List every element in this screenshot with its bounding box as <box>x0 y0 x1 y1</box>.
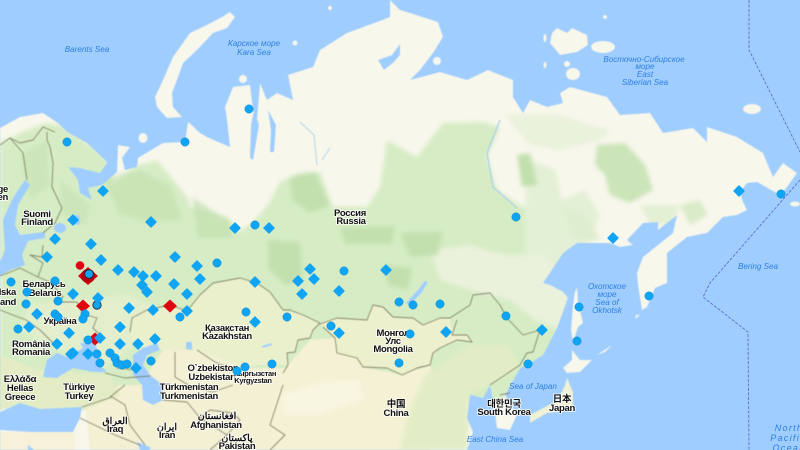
Baltic Sea <box>0 180 45 276</box>
country labels: Greece <box>5 392 35 403</box>
country labels: 대한민국 <box>487 398 521 410</box>
sea labels: Охотское <box>588 282 627 291</box>
country labels: Finland <box>21 217 53 228</box>
country labels: Улс <box>385 336 401 347</box>
sea labels: Восточно-Сибирское <box>603 55 685 64</box>
country labels: Iran <box>159 430 176 441</box>
country labels: پاکستان <box>221 433 253 444</box>
country labels: Türkmenistan <box>160 382 219 393</box>
darker forest patches <box>20 140 538 290</box>
New Siberian Islands <box>550 28 588 55</box>
country labels: South Korea <box>477 407 532 418</box>
country labels: العراق <box>102 416 128 427</box>
country labels: Kyrgyzstan <box>234 376 272 385</box>
sea labels: East <box>637 70 654 79</box>
country labels: Россия <box>334 208 366 219</box>
Lake Baikal <box>406 281 428 305</box>
sea labels: Sea of <box>595 298 619 307</box>
country labels: Turkmenistan <box>160 391 218 402</box>
country labels: Romania <box>12 347 51 358</box>
country labels: Кыргызстан <box>234 369 276 378</box>
Turkey and Balkans <box>0 355 120 410</box>
Seas and lakes <box>0 44 428 450</box>
maritime boundary: international date line <box>703 0 800 450</box>
red markers <box>76 261 177 346</box>
Taklamakan pale band <box>282 382 363 414</box>
country labels: Kazakhstan <box>202 331 252 342</box>
sea labels: Sea of Japan <box>509 382 557 391</box>
country labels: Iraq <box>107 424 124 435</box>
Novaya Zemlya <box>155 12 235 118</box>
Kazakhstan fill <box>130 278 320 368</box>
sea labels: Kara Sea <box>237 48 271 57</box>
Mediterranean Sea <box>0 403 82 432</box>
sea labels: Siberian Sea <box>622 78 669 87</box>
Ob and Yenisei gulfs <box>250 110 259 160</box>
country labels: Russia <box>336 216 367 227</box>
country labels: România <box>12 339 51 350</box>
country labels: Беларусь <box>23 279 66 290</box>
country labels: Turkey <box>65 391 94 402</box>
North Africa <box>0 432 75 450</box>
country labels: O`zbekiston <box>187 363 239 374</box>
China east green <box>400 345 520 450</box>
Black Sea <box>43 343 107 378</box>
Honshu <box>530 378 573 423</box>
Kuril Islands <box>597 315 640 355</box>
Sakhalin <box>571 287 583 342</box>
Volga and Ukraine steppe <box>22 296 150 366</box>
country labels: Afghanistan <box>190 420 242 431</box>
country labels: 中国 <box>387 398 405 410</box>
Mongolia fill <box>320 305 472 375</box>
country labels: Belarus <box>29 288 61 299</box>
country labels: Hellas <box>7 383 33 394</box>
north-east forest <box>595 143 653 203</box>
Aral Sea and Balkhash <box>186 342 272 350</box>
country labels <box>0 184 575 450</box>
country labels: Ελλάδα <box>4 374 37 385</box>
country labels: Türkiye <box>63 382 95 393</box>
sea labels: Barents Sea <box>65 45 110 54</box>
country labels: افغانستان <box>198 411 237 422</box>
Wrangel Island <box>743 104 761 114</box>
country labels: Uzbekistan <box>188 372 236 383</box>
China west desert <box>270 338 440 450</box>
country labels: China <box>384 408 409 419</box>
speckled north-east patches <box>524 162 600 266</box>
Red Sea and Persian Gulf <box>28 442 150 450</box>
sea labels: море <box>597 290 617 299</box>
country borders <box>0 127 540 450</box>
sea labels: Okhotsk <box>592 306 623 315</box>
country labels: Mongolia <box>373 344 414 355</box>
country labels: Україна <box>44 316 78 327</box>
rivers <box>487 120 517 208</box>
Caspian Sea <box>133 343 163 405</box>
sea labels: East China Sea <box>467 435 524 444</box>
lakes <box>54 223 66 233</box>
country labels: ایران <box>157 422 177 433</box>
blue circle markers <box>7 105 785 375</box>
terrain zones <box>0 115 708 450</box>
country labels: Монгол <box>376 328 410 339</box>
Central Asia and Middle East desert <box>85 350 290 450</box>
country labels: Suomi <box>23 209 51 220</box>
sea labels: Bering Sea <box>738 262 779 271</box>
light green forest zone <box>0 122 570 400</box>
sea labels: море <box>635 62 655 71</box>
Hokkaido <box>563 350 592 373</box>
sea labels: Карское море <box>228 39 280 48</box>
country labels: Қазақстан <box>205 323 250 334</box>
country labels: Japan <box>549 403 575 414</box>
blue diamond markers <box>24 186 744 373</box>
islands <box>138 6 800 373</box>
country labels: 日本 <box>553 393 572 405</box>
